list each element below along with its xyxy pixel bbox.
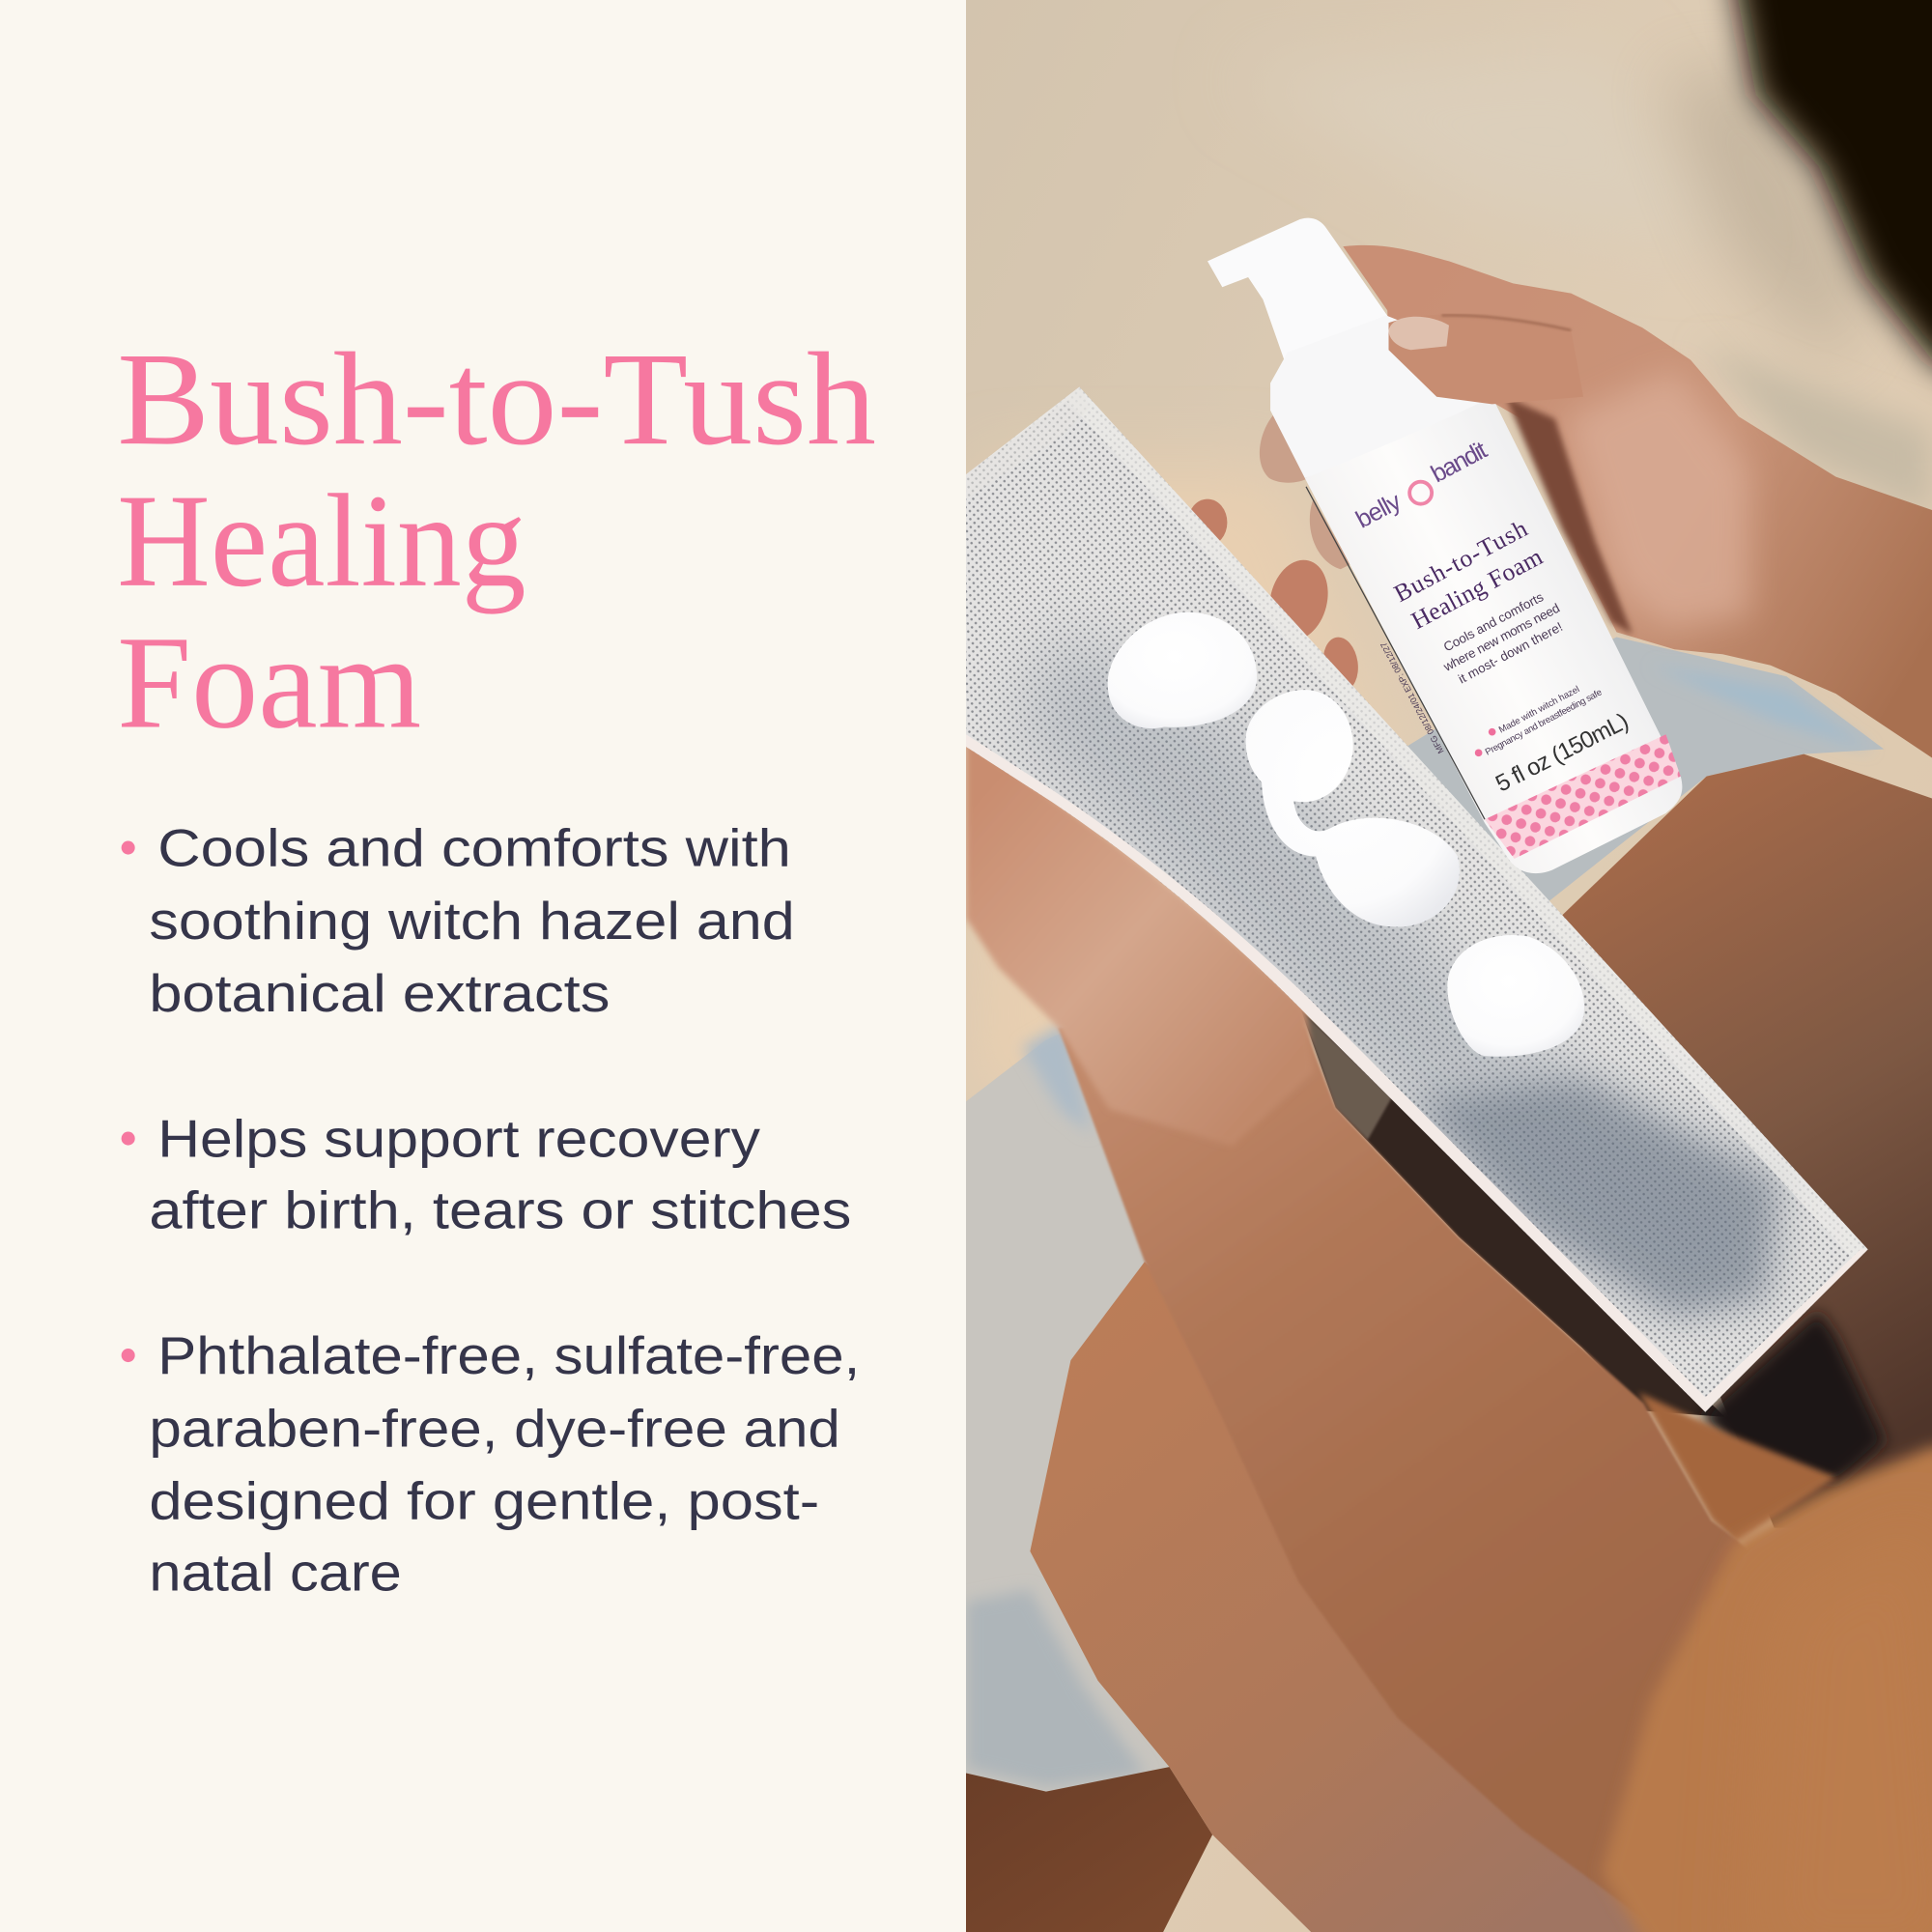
bottle <box>1208 218 1682 873</box>
left text panel <box>0 0 966 1932</box>
title: Healing <box>117 467 526 614</box>
bullet: cools and comforts: botanical extracts <box>149 963 610 1023</box>
blue-grey shorts behind bottle <box>1399 637 1884 918</box>
bottom hand <box>966 739 1314 1146</box>
bottle label text: Cools and comforts <box>1441 589 1546 654</box>
palm highlight <box>1565 370 1749 629</box>
bullet: recovery support <box>122 1109 851 1240</box>
upper arm and body, bottom right <box>1602 1446 1932 1932</box>
right leg <box>1540 754 1932 1528</box>
bullet: free-from claims: paraben-free, dye-free and <box>149 1398 840 1458</box>
body <box>1305 397 1682 873</box>
forearm <box>1058 1028 1743 1901</box>
bottle label text: Bush-to-Tush <box>1389 514 1532 608</box>
fingers behind pad <box>1188 499 1361 694</box>
thumb crease <box>1441 315 1571 330</box>
foam dollops <box>1108 612 1584 1057</box>
bullet: free-from claims: designed for gentle, post- <box>149 1471 819 1531</box>
bullet: free-from claims <box>122 1325 860 1603</box>
pad with mesh <box>966 387 1868 1412</box>
thumbnail <box>1389 317 1449 350</box>
bottle label text <box>1351 437 1633 797</box>
lighter border of pad <box>966 387 1868 1262</box>
bullet: free-from claims: Phthalate-free, sulfate-free, <box>157 1325 860 1385</box>
bottle label text: it most- down there! <box>1456 619 1565 687</box>
bottle label text: belly <box>1351 488 1406 533</box>
photo background <box>966 0 1932 1932</box>
bottle label text: 5 fl oz (150mL) <box>1492 708 1633 797</box>
patterned band <box>1485 734 1681 859</box>
title: Foam <box>117 609 421 756</box>
thigh, lower left <box>1030 1262 1648 1932</box>
top hand: fingers, palm and wrist <box>1343 245 1932 757</box>
collar <box>1270 316 1497 478</box>
bottle label text: where new moms need <box>1440 601 1562 674</box>
bullet: recovery support: Helps support recovery <box>157 1109 761 1169</box>
thumb over bottle <box>1389 314 1583 404</box>
lower leg, bottom left <box>966 1767 1212 1932</box>
photo panel: hands holding foam bottle and pad <box>966 0 1932 1932</box>
bottle label text: Made with witch hazel <box>1497 684 1581 736</box>
bullet: cools and comforts: soothing witch hazel and <box>149 891 795 951</box>
title <box>117 325 876 756</box>
shadow between palm and bottle <box>1506 397 1633 635</box>
pump <box>1208 218 1392 370</box>
bullet: free-from claims: natal care <box>149 1543 402 1603</box>
side label line and batch code: MFG 08/12/24/01 EXP: 08/12/27 <box>1378 640 1446 755</box>
dark hair, top right <box>1729 0 1932 382</box>
bottle label text: Healing Foam <box>1406 542 1548 635</box>
bullet: cools and comforts <box>122 818 795 1023</box>
fingertips left of bottle <box>1260 407 1350 569</box>
grey shorts, lower left <box>966 1023 1169 1792</box>
bullet: cools and comforts: Cools and comforts with <box>157 818 791 878</box>
bottle label text: Pregnancy and breastfeeding safe <box>1484 687 1604 758</box>
bottle label text: bandit <box>1427 437 1492 488</box>
bullet: recovery support: after birth, tears or stitches <box>149 1180 851 1240</box>
elbow skin <box>1638 1392 1836 1543</box>
title: Bush-to-Tush <box>117 325 876 472</box>
dark gap under pad <box>1301 1010 1886 1485</box>
side label line and batch code <box>1306 487 1485 819</box>
